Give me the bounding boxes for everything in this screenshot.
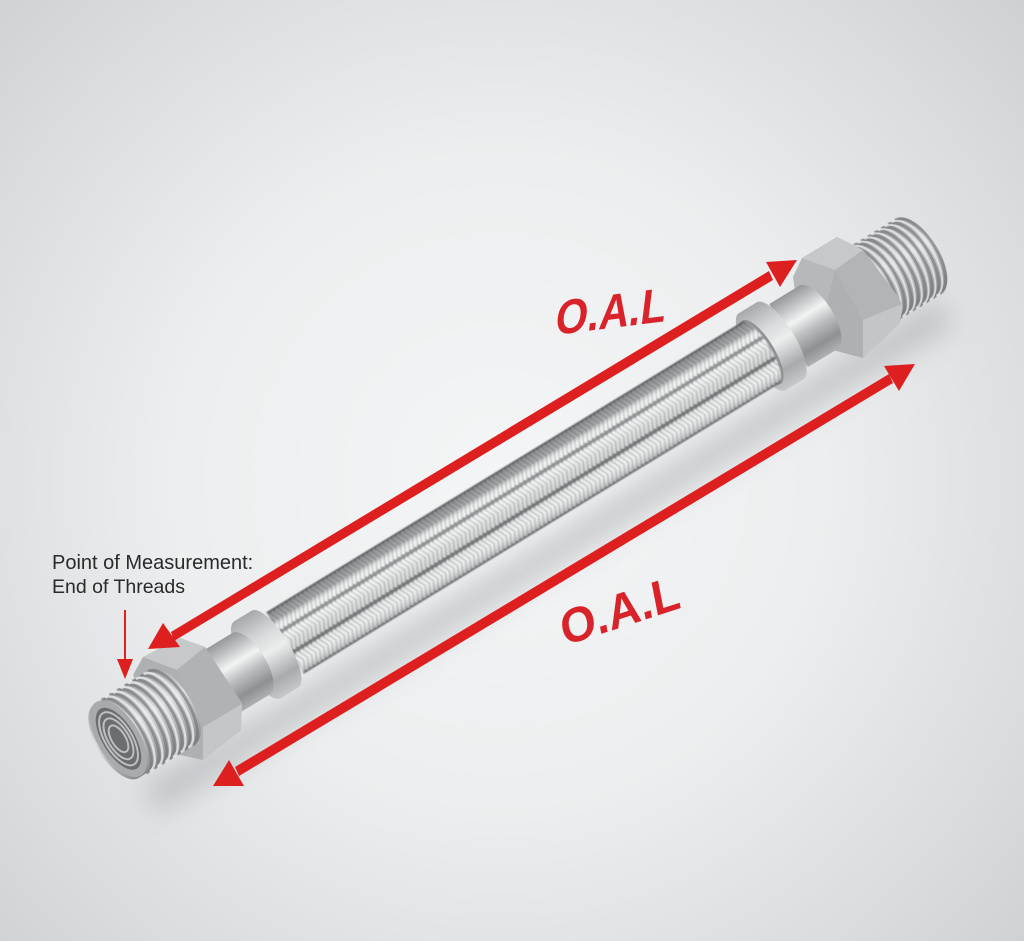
lower O.A.L arrow [213, 364, 915, 786]
upper O.A.L arrow [148, 260, 797, 649]
braided hose assembly [76, 209, 959, 788]
left threaded end [76, 659, 211, 788]
point of measurement note: Point of Measurement: [52, 552, 253, 574]
braided section [266, 316, 789, 674]
thread mouth [78, 691, 159, 786]
point of measurement note: End of Threads [52, 576, 185, 598]
right neck and collar [727, 271, 855, 397]
left neck [191, 625, 282, 720]
point of measurement arrow [117, 610, 133, 679]
left hex nut [133, 638, 242, 760]
right threaded end [843, 209, 959, 325]
upper O.A.L label: O.A.L [553, 277, 670, 346]
hose shadow [150, 312, 945, 800]
left collar [221, 603, 311, 706]
right hex nut [793, 237, 902, 358]
lower O.A.L label: O.A.L [556, 566, 684, 657]
